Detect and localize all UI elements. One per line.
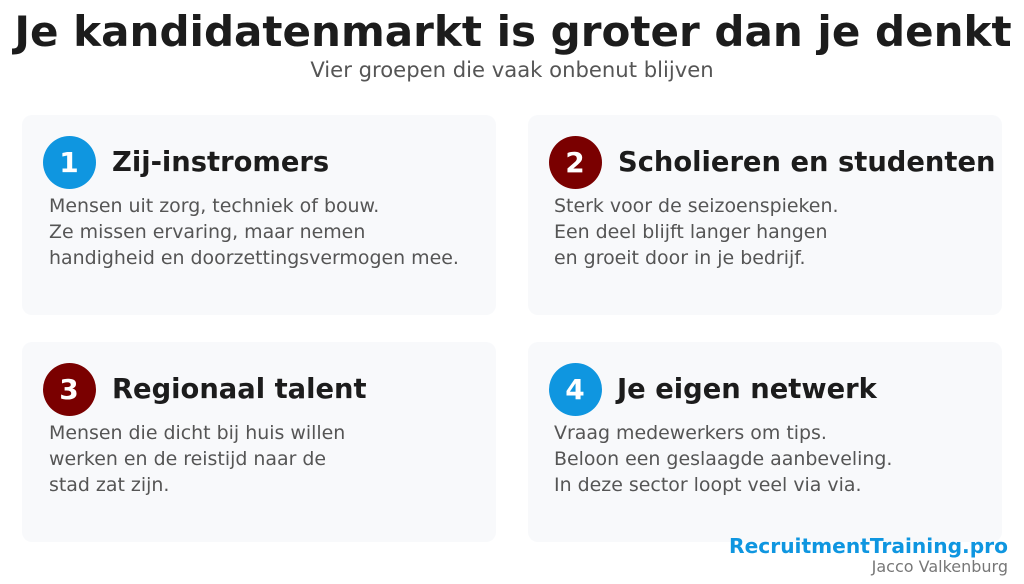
panel: zij-instromers [22,115,496,315]
brand name: RecruitmentTraining.pro [729,534,1008,558]
icon: number 4 [549,363,602,416]
author: Jacco Valkenburg [872,557,1008,576]
text: zij-instromers: Mensen uit zorg, techniek of bouw. [49,195,379,217]
heading: regionaal talent: Regionaal talent [112,374,367,405]
text: je eigen netwerk: In deze sector loopt veel via via. [554,474,862,496]
heading: je eigen netwerk: Je eigen netwerk [617,374,877,405]
title: Je kandidatenmarkt is groter dan je denkt [14,7,1012,56]
text: regionaal talent: stad zat zijn. [49,474,169,496]
icon: number 1: 1 [59,146,79,179]
text: scholieren en studenten: en groeit door in je bedrijf. [554,247,806,269]
text: zij-instromers: handigheid en doorzettingsvermogen mee. [49,247,459,269]
text: regionaal talent: werken en de reistijd naar de [49,448,326,470]
text: je eigen netwerk [554,422,892,496]
text: je eigen netwerk: Vraag medewerkers om tips. [554,422,827,444]
icon: number 1 [43,136,96,189]
panel: je eigen netwerk [528,342,1002,542]
heading: zij-instromers: Zij-instromers [112,147,329,178]
icon: number 4: 4 [565,373,585,406]
text: regionaal talent [49,422,345,496]
text: scholieren en studenten: Een deel blijft langer hangen [554,221,827,243]
icon: number 3 [43,363,96,416]
icon: number 2 [549,136,602,189]
subtitle: Vier groepen die vaak onbenut blijven [310,57,714,82]
text: regionaal talent: Mensen die dicht bij huis willen [49,422,345,444]
panel: regionaal talent [22,342,496,542]
icon: number 2: 2 [565,146,585,179]
icon: number 3: 3 [59,373,79,406]
text: zij-instromers [49,195,459,269]
text: scholieren en studenten [554,195,838,269]
text: zij-instromers: Ze missen ervaring, maar nemen [49,221,365,243]
panel: scholieren en studenten [528,115,1002,315]
text: scholieren en studenten: Sterk voor de seizoenspieken. [554,195,838,217]
heading: scholieren en studenten: Scholieren en studenten [618,147,995,178]
text: je eigen netwerk: Beloon een geslaagde aanbeveling. [554,448,892,470]
